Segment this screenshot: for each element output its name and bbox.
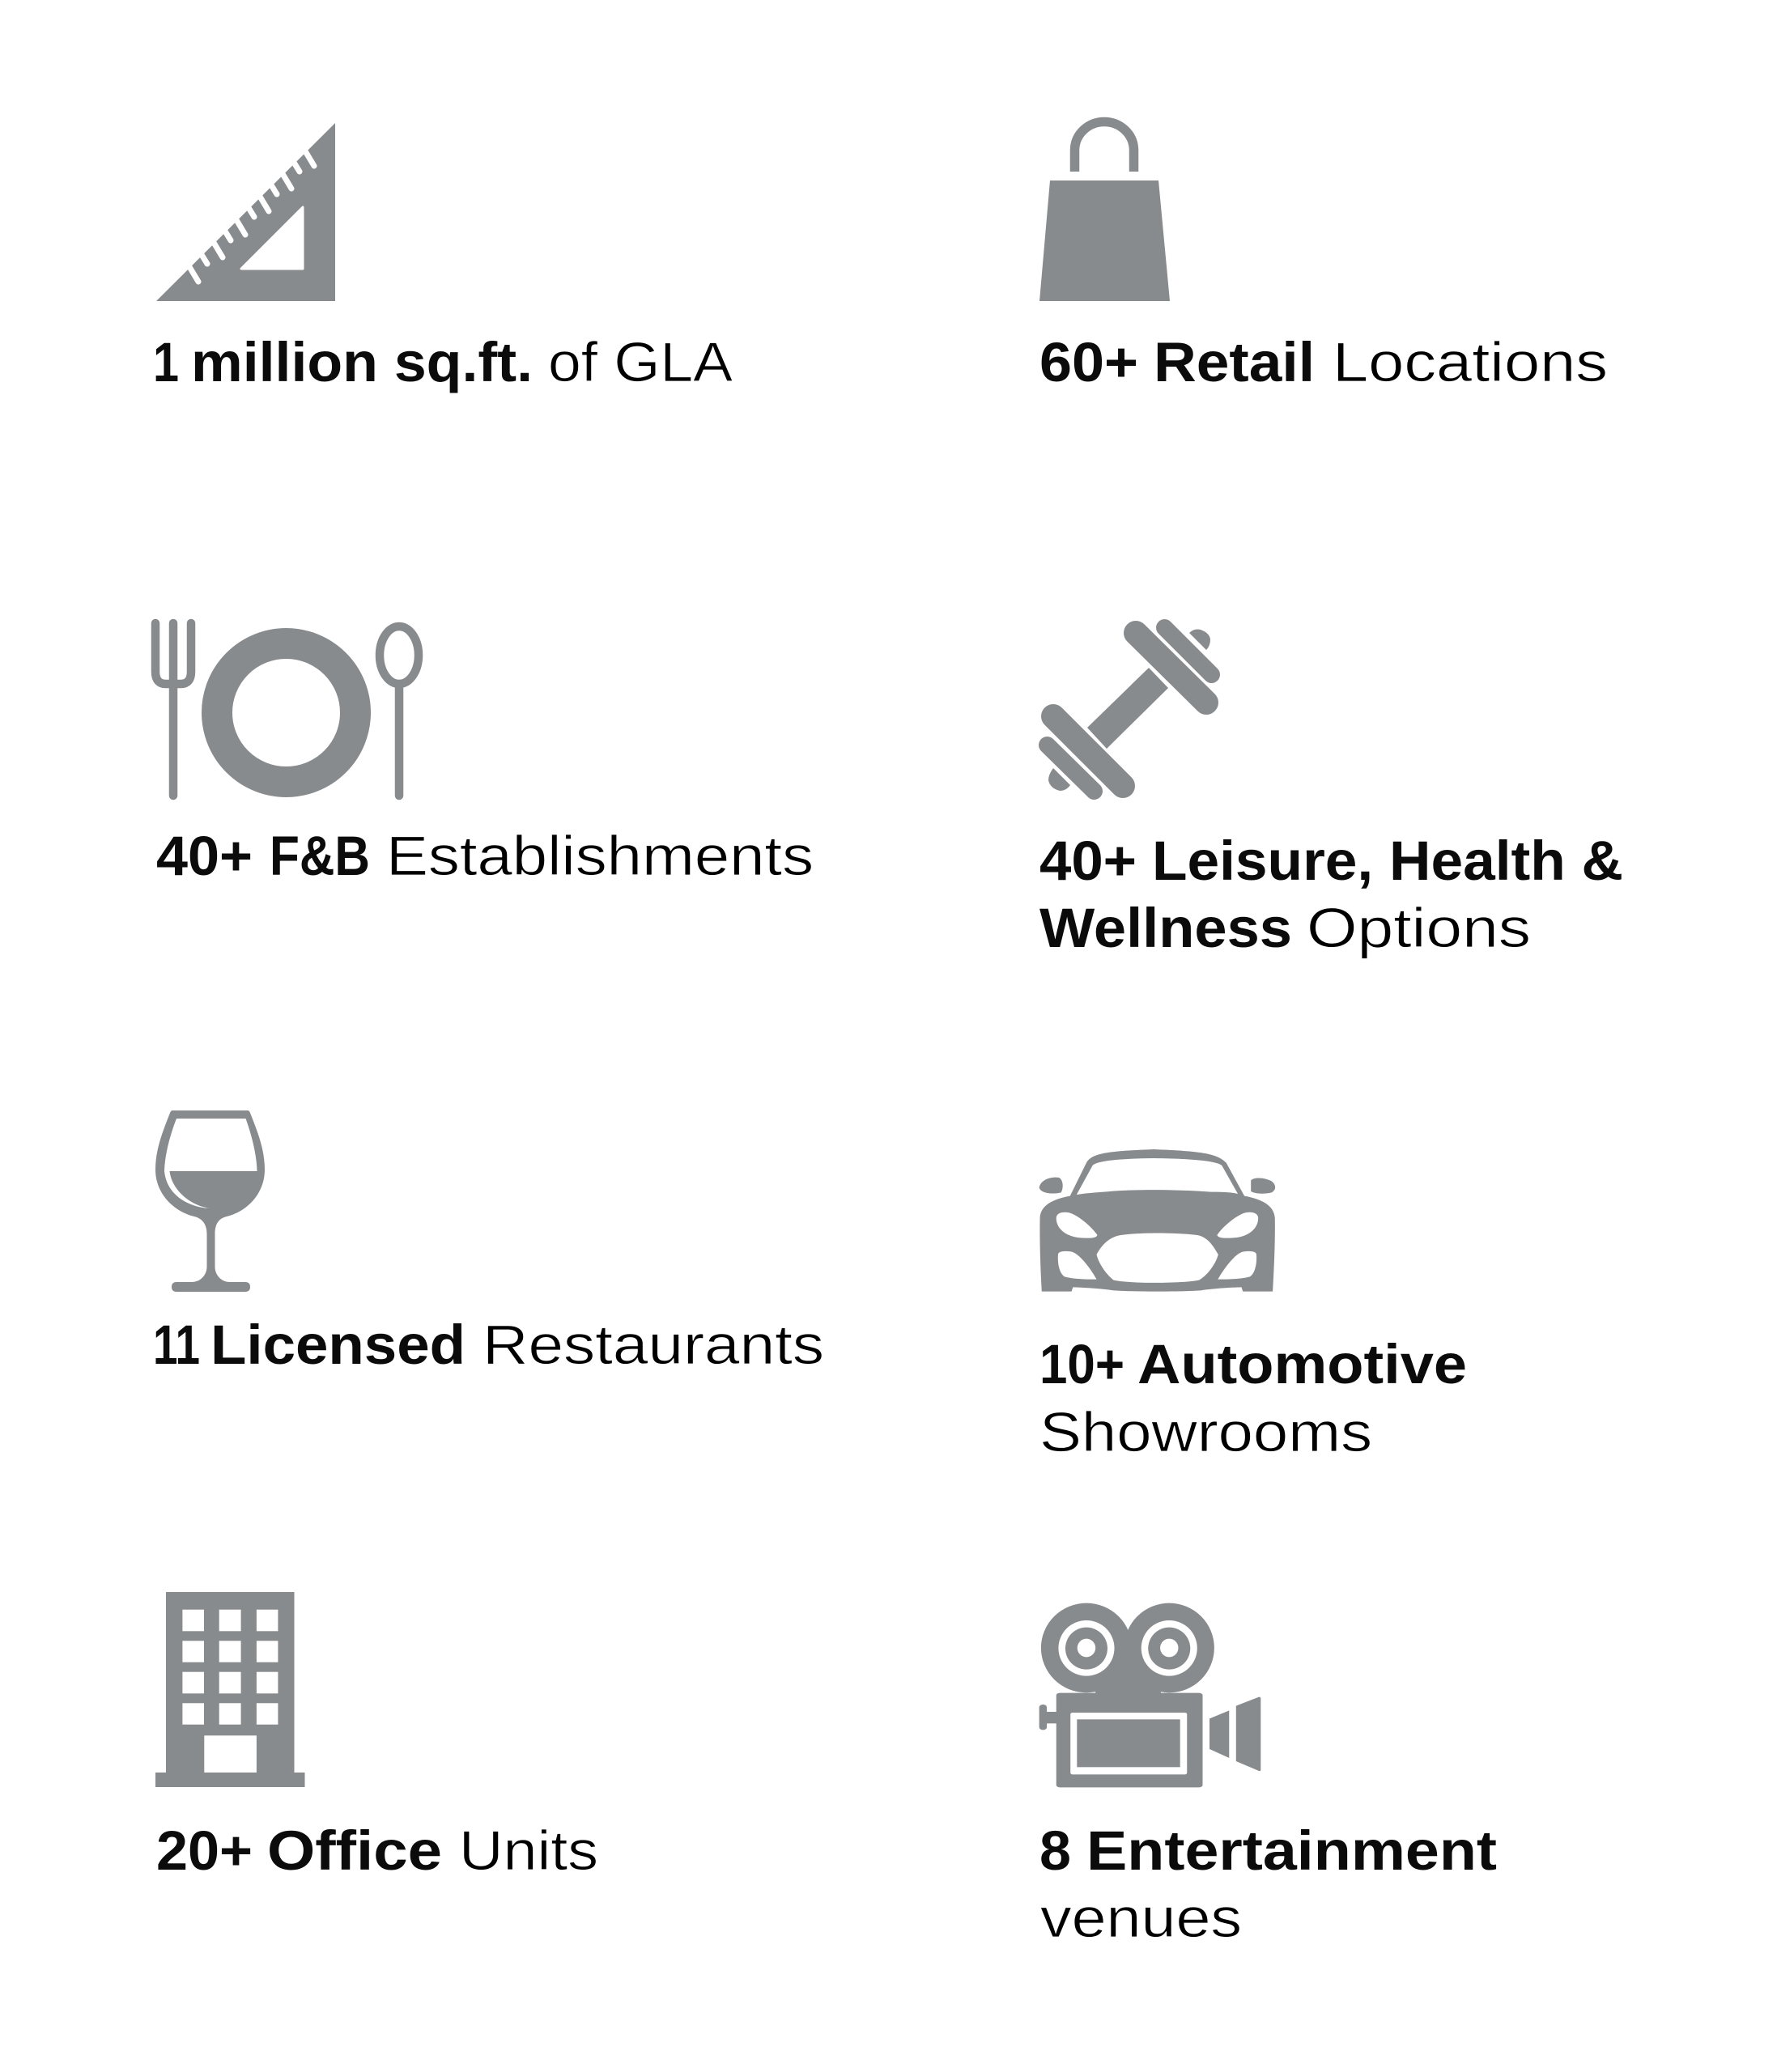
label: 40+ Leisure, Health & Wellness Options: Options — [1307, 897, 1531, 959]
icon: car front view — [1039, 1149, 1275, 1292]
panel: leisure, health and wellness — [1039, 628, 1623, 959]
label: 8 Entertainment venues: venues — [1040, 1887, 1242, 1949]
label: 40+ F&B Establishments — [156, 825, 814, 887]
label: 60+ Retail Locations — [1039, 331, 1608, 393]
label: 60+ Retail Locations: Locations — [1333, 331, 1608, 393]
icon: set square ruler — [156, 123, 335, 301]
label: 10+ Automotive Showrooms — [1039, 1333, 1467, 1463]
label: 1 million sq.ft. of GLA — [153, 331, 733, 393]
label: 40+ F&B Establishments: F&B — [270, 825, 370, 887]
label: 8 Entertainment venues — [1039, 1819, 1497, 1949]
label: 60+ Retail Locations: Retail — [1154, 331, 1315, 393]
label: 40+ Leisure, Health & Wellness Options: Wellness — [1039, 897, 1292, 959]
label: 8 Entertainment venues: Entertainment — [1086, 1819, 1497, 1882]
label: 1 million sq.ft. of GLA: of GLA — [548, 331, 733, 393]
label: 11 Licensed Restaurants — [153, 1314, 824, 1376]
label: 20+ Office Units: Units — [459, 1819, 598, 1882]
panel: automotive showrooms — [1039, 1149, 1467, 1463]
panel: food and beverage — [155, 623, 814, 887]
label: 10+ Automotive Showrooms: Showrooms — [1039, 1401, 1372, 1463]
label: 40+ Leisure, Health & Wellness Options — [1039, 830, 1623, 959]
icon: shopping bag — [1039, 121, 1170, 301]
icon: fork, plate and spoon — [155, 623, 419, 796]
panel: licensed restaurants — [153, 1110, 824, 1376]
label: 10+ Automotive Showrooms: Automotive — [1137, 1333, 1467, 1395]
label: 10+ Automotive Showrooms: 10+ — [1039, 1333, 1124, 1395]
icon: office building — [155, 1592, 304, 1787]
panel: office units — [155, 1592, 598, 1882]
icon: wine glass — [155, 1110, 265, 1292]
label: 20+ Office Units: 20+ — [156, 1819, 253, 1882]
label: 20+ Office Units: Office — [267, 1819, 442, 1882]
label: 11 Licensed Restaurants: Restaurants — [483, 1314, 824, 1376]
label: 8 Entertainment venues: 8 — [1039, 1819, 1071, 1882]
icon: film camera — [1039, 1603, 1260, 1787]
label: 20+ Office Units — [156, 1819, 598, 1882]
label: 1 million sq.ft. of GLA: million sq.ft. — [191, 331, 533, 393]
label: 40+ F&B Establishments: 40+ — [156, 825, 253, 887]
panel: retail locations — [1039, 121, 1608, 393]
icon: dumbbell — [1048, 628, 1211, 792]
panel: gross leasable area — [153, 123, 733, 393]
label: 60+ Retail Locations: 60+ — [1039, 331, 1138, 393]
label: 40+ Leisure, Health & Wellness Options: Leisure, Health & — [1152, 830, 1623, 892]
label: 11 Licensed Restaurants: Licensed — [210, 1314, 466, 1376]
label: 11 Licensed Restaurants: 11 — [153, 1314, 200, 1376]
label: 40+ F&B Establishments: Establishments — [386, 825, 814, 887]
panel: entertainment venues — [1039, 1603, 1497, 1949]
label: 1 million sq.ft. of GLA: 1 — [153, 331, 179, 393]
label: 40+ Leisure, Health & Wellness Options: 40+ — [1039, 830, 1137, 892]
